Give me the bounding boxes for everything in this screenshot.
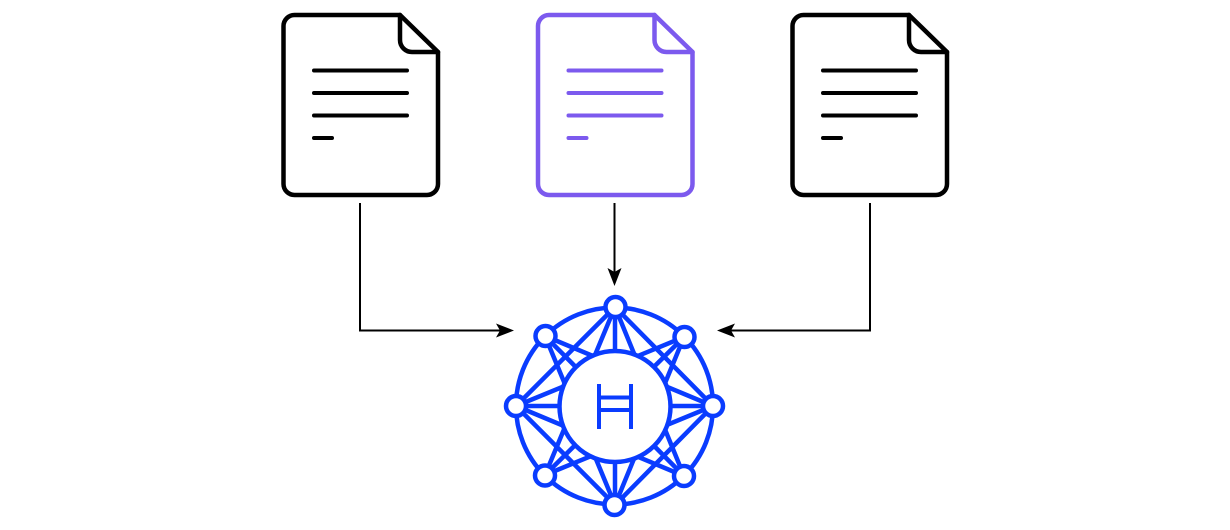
arrow: center document to network [608, 203, 622, 286]
logo: H mark [599, 384, 631, 429]
arrow: right document to network [717, 203, 870, 338]
outer ring [516, 308, 713, 504]
center circle [560, 351, 670, 462]
icon: left black document [284, 15, 438, 195]
icon: hashgraph network [506, 297, 723, 515]
network nodes [506, 297, 723, 515]
arrow: left document to network [360, 203, 514, 338]
icon: center purple document [538, 15, 692, 195]
network connections [516, 307, 713, 505]
icon: right black document [792, 15, 947, 195]
